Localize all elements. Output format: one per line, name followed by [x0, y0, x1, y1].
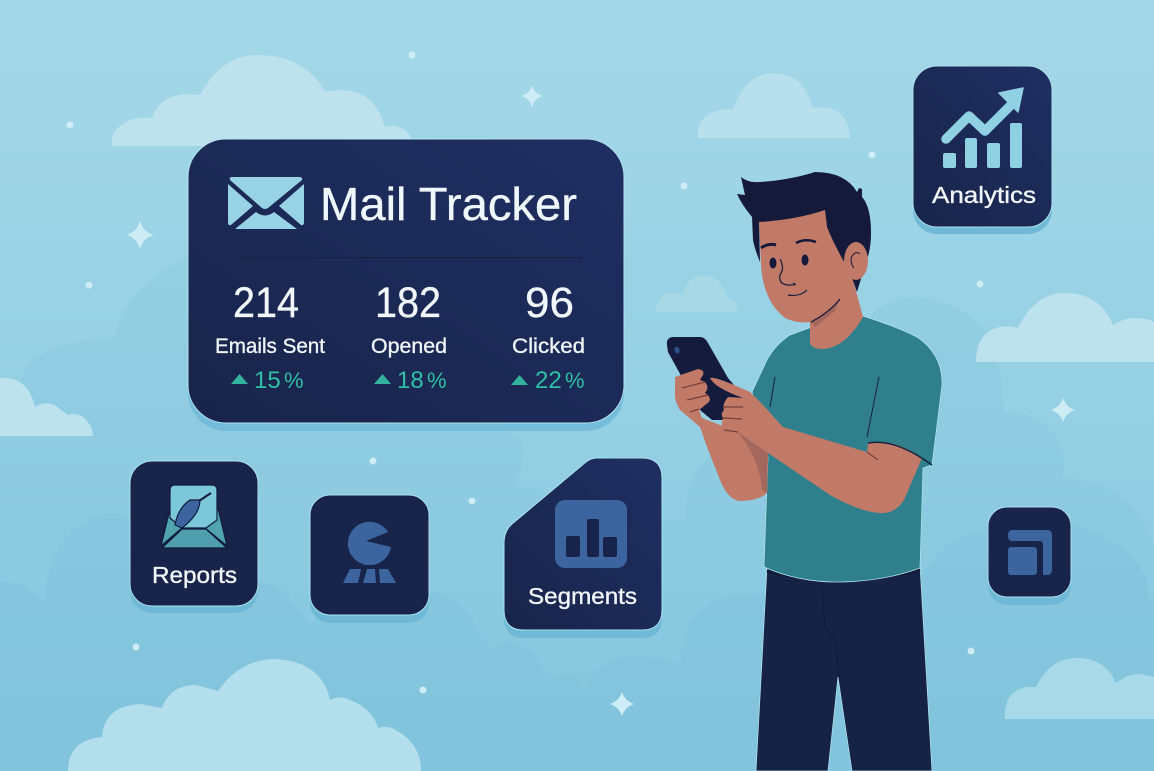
- face: [759, 205, 853, 322]
- panel: segments: [504, 458, 662, 638]
- stat: opened: 182: [375, 279, 441, 327]
- eyes and brows: [761, 240, 816, 268]
- icon: envelope: [228, 177, 304, 229]
- panel: pie icon: [310, 495, 429, 623]
- panel: analytics: [913, 66, 1052, 234]
- stat: emails sent: Emails Sent: [215, 335, 325, 358]
- left hand and forearm: [675, 369, 768, 501]
- icon: layered squares: [1008, 530, 1052, 575]
- cloud: top left: [112, 55, 412, 146]
- stat: emails sent: %: [284, 368, 304, 393]
- ear: [844, 242, 868, 280]
- t-shirt: [752, 316, 942, 582]
- phone: [667, 337, 745, 420]
- icon: growth chart: [943, 88, 1023, 168]
- nose and mouth: [780, 259, 840, 322]
- stat: opened: Opened: [371, 335, 447, 358]
- stat: opened: [371, 279, 447, 394]
- panel: reports: [130, 461, 258, 613]
- stat: emails sent: 214: [233, 279, 299, 327]
- cloud: right: [976, 293, 1154, 362]
- stat: clicked: [511, 279, 585, 394]
- stat: emails sent: 15: [254, 367, 281, 394]
- icon: envelope with quill: [161, 485, 227, 548]
- label: Segments: [528, 583, 637, 609]
- panel: mail tracker: [188, 139, 624, 431]
- stat: opened: 18: [397, 367, 424, 394]
- icon: bar chart: [555, 500, 627, 568]
- label: Analytics: [932, 182, 1036, 208]
- person: [667, 172, 942, 771]
- icon: pie and bars: [343, 522, 396, 583]
- stat: clicked: 96: [525, 279, 574, 327]
- cloud: top centre right: [698, 73, 850, 138]
- stat: emails sent: [215, 279, 325, 394]
- neck: [810, 280, 863, 349]
- cloud: bottom left: [68, 659, 421, 771]
- stat: clicked: Clicked: [512, 335, 585, 358]
- stat: clicked: %: [565, 368, 585, 393]
- right arm and hand: [710, 378, 932, 513]
- cloud: small middle: [655, 275, 737, 312]
- hair: [737, 172, 871, 292]
- trousers: [756, 566, 932, 771]
- cloud: left edge: [0, 378, 93, 436]
- label: Reports: [152, 562, 237, 588]
- panel: small square icon: [988, 507, 1071, 605]
- sparkles and dots: [66, 52, 1075, 716]
- heading: Mail Tracker: [320, 178, 577, 230]
- cloud: bottom right: [1005, 658, 1154, 719]
- stat: opened: %: [427, 368, 447, 393]
- stat: clicked: 22: [535, 367, 562, 394]
